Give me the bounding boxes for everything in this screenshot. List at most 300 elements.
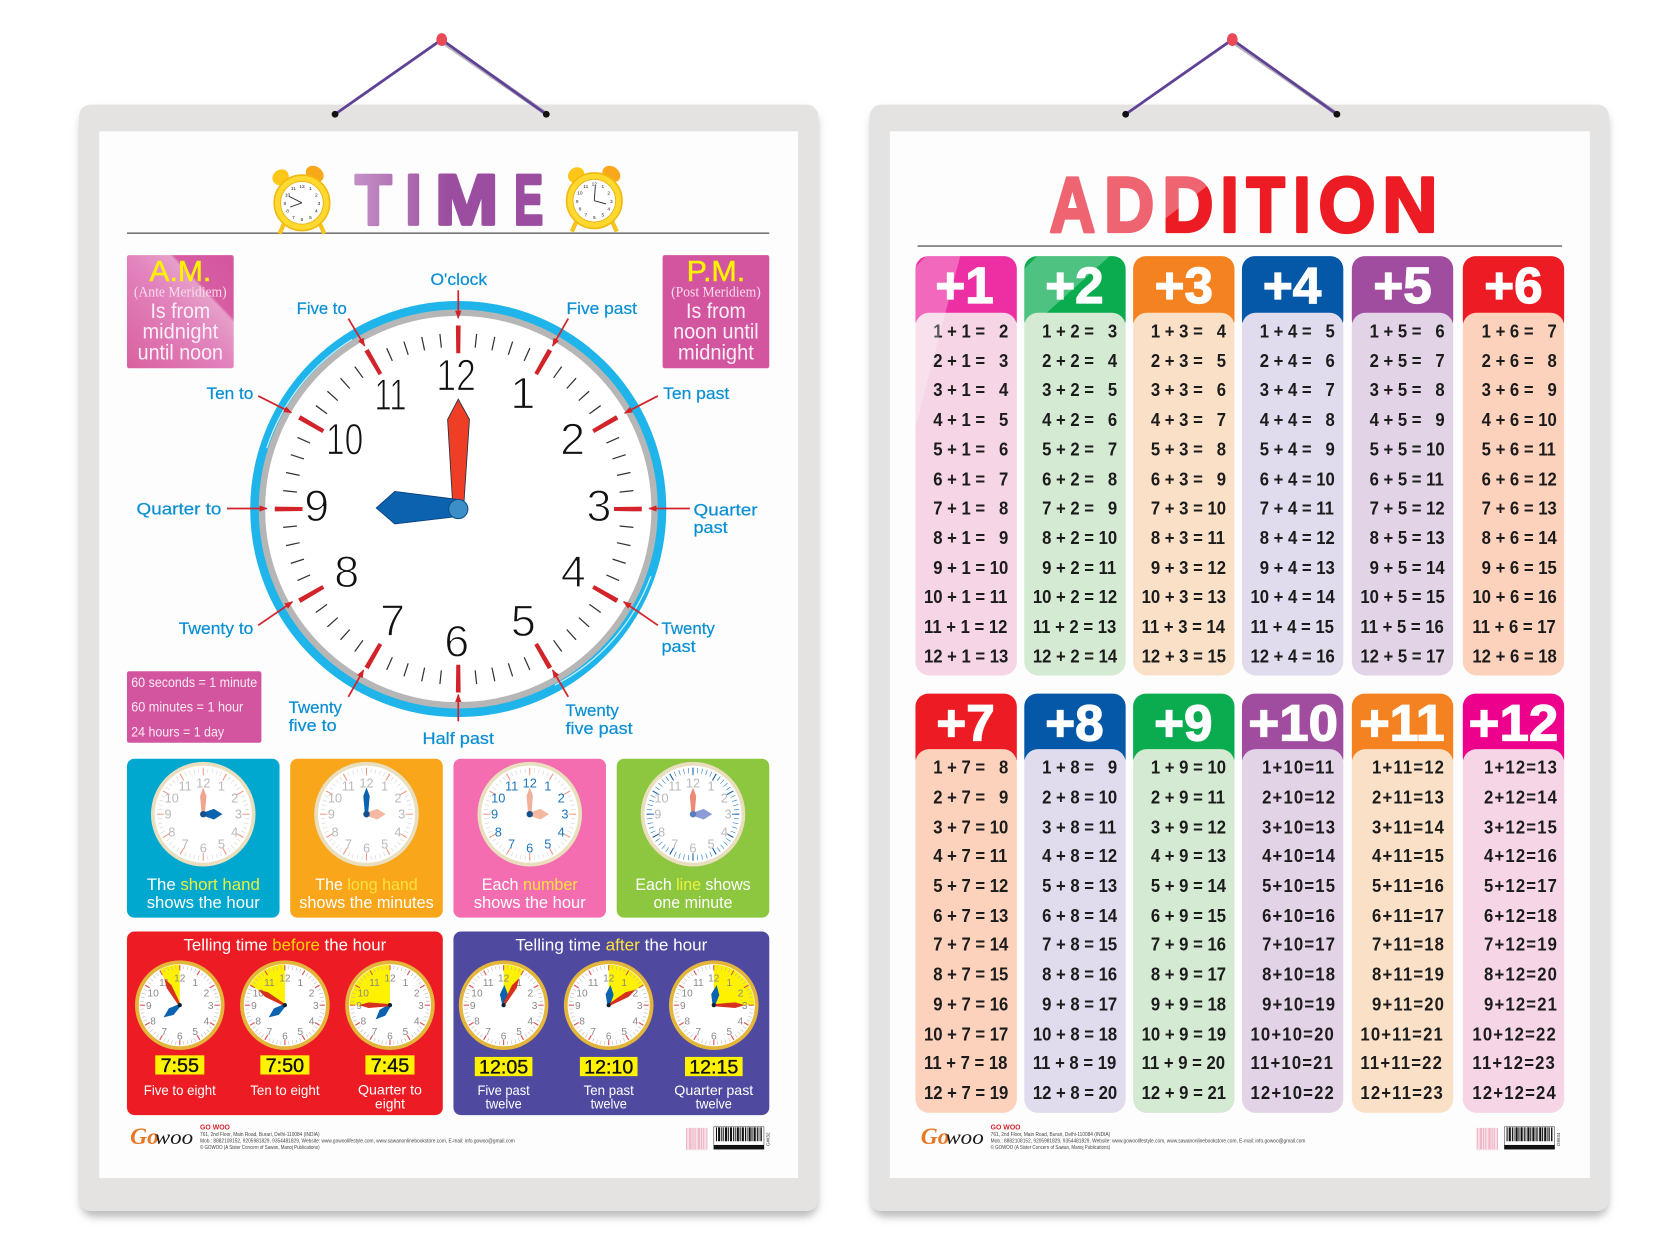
clock 12:10: 6 bbox=[606, 1031, 612, 1042]
panel: time units: 24 hours = 1 day bbox=[131, 723, 224, 739]
table rows: 1 + 4 = 5 bbox=[1250, 321, 1335, 341]
table rows: 4 + 8 = 12 bbox=[1033, 846, 1117, 866]
clock: 4 bbox=[558, 825, 565, 840]
table rows: 7 + 8 = 15 bbox=[1033, 934, 1117, 955]
clock 7:45 bbox=[345, 960, 435, 1050]
table rows: 10 + 7 = 17 bbox=[924, 1024, 1008, 1045]
logo: woo bbox=[155, 1127, 193, 1149]
table rows: 2 + 5 = 7 bbox=[1360, 350, 1445, 371]
table rows: 11 + 4 = 15 bbox=[1250, 616, 1334, 637]
clock: 5 bbox=[218, 836, 225, 851]
time 12:15: 12:15 bbox=[689, 1057, 738, 1078]
table rows: 11 + 2 = 13 bbox=[1033, 616, 1117, 637]
clock 7:55: 3 bbox=[208, 1001, 214, 1012]
table rows: 11 + 9 = 20 bbox=[1142, 1053, 1225, 1073]
card: each number: shows the hour bbox=[474, 893, 586, 912]
table rows: 12+12=24 bbox=[1472, 1082, 1557, 1103]
panel: P.M.: noon until bbox=[673, 319, 759, 343]
table rows: 2 + 4 = 6 bbox=[1250, 350, 1335, 371]
minute hand bbox=[448, 399, 469, 508]
table rows: 4 + 3 = 7 bbox=[1142, 409, 1226, 430]
board: addition poster frame bbox=[870, 105, 1609, 1216]
card: long hand: shows the minutes bbox=[299, 893, 434, 912]
table rows: 11 + 3 = 14 bbox=[1142, 616, 1225, 637]
icon: left alarm clock: 12 bbox=[299, 184, 305, 190]
labels: Five to bbox=[297, 299, 347, 318]
clock 7:45: 3 bbox=[418, 1001, 424, 1012]
table rows: 8 + 7 = 15 bbox=[924, 964, 1009, 985]
labels: Twenty to bbox=[179, 619, 253, 638]
table rows: 10+11=21 bbox=[1360, 1024, 1444, 1045]
table rows: 12 + 4 = 16 bbox=[1250, 646, 1335, 667]
table rows: 8 + 1 = 9 bbox=[924, 528, 1009, 548]
clock numbers: 5 bbox=[511, 596, 536, 646]
clock: 2 bbox=[721, 790, 728, 805]
table rows: 12 + 2 = 14 bbox=[1033, 646, 1117, 667]
clock 7:55: 7 bbox=[161, 1027, 167, 1038]
table rows: 8 + 5 = 13 bbox=[1360, 528, 1445, 548]
table rows: 2 + 8 = 10 bbox=[1033, 787, 1117, 808]
table rows: 6 + 9 = 15 bbox=[1142, 905, 1226, 926]
table rows: 6+12=18 bbox=[1472, 905, 1558, 926]
caption: Ten to eight bbox=[250, 1082, 320, 1098]
icon: left alarm clock: 11 bbox=[291, 186, 296, 192]
labels: Quarter to bbox=[137, 499, 221, 518]
column: +8 bbox=[1024, 694, 1126, 1113]
divider line: addition title bbox=[918, 245, 1562, 247]
title: ADDITION: I bbox=[1293, 161, 1311, 249]
table rows: 9 + 8 = 17 bbox=[1033, 994, 1117, 1015]
labels bbox=[137, 270, 758, 748]
table rows bbox=[1360, 757, 1445, 1103]
table rows: 4 + 9 = 13 bbox=[1142, 846, 1226, 866]
table rows: 3 + 3 = 6 bbox=[1142, 379, 1226, 400]
clock 12:15: 8 bbox=[684, 1016, 690, 1027]
table rows bbox=[1360, 321, 1445, 667]
clock: 10 bbox=[654, 790, 669, 805]
clock 7:50: 1 bbox=[298, 978, 304, 989]
table rows: 9 + 9 = 18 bbox=[1142, 994, 1226, 1015]
table rows: 1 + 9 = 10 bbox=[1142, 757, 1226, 778]
clock 7:45: 5 bbox=[403, 1027, 409, 1038]
column: +5 bbox=[1352, 256, 1453, 675]
clock 7:50: 9 bbox=[251, 1001, 257, 1012]
clock 7:55: 5 bbox=[192, 1027, 198, 1038]
logo bbox=[130, 1124, 193, 1150]
column: +11: +11 bbox=[1359, 695, 1445, 752]
table rows: 3 + 2 = 5 bbox=[1033, 379, 1117, 400]
clock 12:05: 8 bbox=[474, 1016, 480, 1027]
table rows: 5 + 4 = 9 bbox=[1250, 439, 1335, 460]
table rows: 4 + 5 = 9 bbox=[1360, 409, 1445, 430]
table rows: 8+12=20 bbox=[1472, 964, 1558, 985]
column: +10: +10 bbox=[1248, 695, 1338, 752]
title: ADDITION: D bbox=[1162, 161, 1213, 249]
publisher details: © GOWOO (A Sister Concern of Sawan, Manoj Publications) bbox=[991, 1144, 1110, 1151]
title: ADDITION: D bbox=[1104, 161, 1154, 249]
time 7:55: 7:55 bbox=[161, 1056, 199, 1077]
icon: left alarm clock: 2 bbox=[315, 192, 318, 198]
table rows: 9+10=19 bbox=[1250, 994, 1336, 1015]
clock 7:50 bbox=[240, 960, 330, 1050]
table rows: 2 + 6 = 8 bbox=[1472, 350, 1557, 371]
clock: 6 bbox=[689, 841, 697, 856]
icon: right alarm clock: 12 bbox=[592, 182, 597, 188]
clock 7:50: 7 bbox=[267, 1027, 273, 1038]
clock bbox=[641, 762, 745, 866]
table rows: 7 + 4 = 11 bbox=[1250, 498, 1334, 519]
clock 7:45: 6 bbox=[387, 1031, 393, 1042]
table rows: 8 + 6 = 14 bbox=[1472, 528, 1557, 548]
publisher details: 761, 2nd Floor, Main Road, Burari, Delhi-110084 (INDIA) bbox=[991, 1132, 1110, 1138]
table rows: 11 + 6 = 17 bbox=[1472, 616, 1556, 637]
clock 7:50: 4 bbox=[309, 1016, 315, 1027]
column: +10 bbox=[1242, 694, 1343, 1113]
clock 7:45: 10 bbox=[358, 989, 369, 1000]
clock 12:05: 10 bbox=[471, 989, 483, 1000]
title: ADDITION: N bbox=[1382, 161, 1438, 249]
publisher details: GO WOO bbox=[991, 1122, 1021, 1131]
column: +6 bbox=[1463, 256, 1564, 675]
table rows: 2 + 2 = 4 bbox=[1033, 350, 1117, 371]
time 7:45: 7:45 bbox=[371, 1056, 409, 1077]
title: ADDITION: O bbox=[1318, 161, 1375, 249]
time 7:50: 7:50 bbox=[266, 1056, 304, 1077]
clock 12:05: 7 bbox=[485, 1027, 491, 1038]
table rows: 11 + 8 = 19 bbox=[1033, 1053, 1117, 1073]
publisher details: 761, 2nd Floor, Main Road, Burari, Delhi-110084 (INDIA) bbox=[200, 1132, 320, 1138]
clock: 12 bbox=[523, 776, 537, 791]
table rows: 5 + 2 = 7 bbox=[1033, 439, 1117, 460]
table rows: 7 + 7 = 14 bbox=[924, 934, 1009, 955]
icon: left alarm clock: 5 bbox=[309, 215, 312, 221]
table rows bbox=[924, 321, 1009, 667]
table rows: 4 + 6 = 10 bbox=[1472, 409, 1557, 430]
clock 7:55: 2 bbox=[204, 989, 210, 1000]
table rows bbox=[1472, 321, 1557, 667]
labels: Twenty bbox=[662, 619, 716, 638]
card: short hand: shows the hour bbox=[147, 893, 260, 912]
logo: Go bbox=[130, 1124, 159, 1150]
table rows: 10 + 4 = 14 bbox=[1250, 586, 1335, 607]
panel: P.M.: Is from bbox=[686, 299, 746, 323]
title: TIME: M bbox=[435, 160, 498, 239]
clock: 7 bbox=[345, 836, 352, 851]
icon: right alarm clock: 2 bbox=[607, 190, 610, 196]
clock 12:10: 1 bbox=[621, 978, 627, 989]
clock: 9 bbox=[491, 806, 498, 821]
caption bbox=[674, 1082, 753, 1112]
labels: Ten past bbox=[663, 384, 730, 403]
caption: twelve bbox=[591, 1096, 627, 1112]
clock: 2 bbox=[558, 790, 565, 805]
labels: O'clock bbox=[431, 270, 488, 289]
column: +12: +12 bbox=[1469, 695, 1558, 752]
clock 7:45: 12 bbox=[384, 974, 396, 985]
card: long hand bbox=[290, 759, 443, 918]
table rows: 3 + 5 = 8 bbox=[1360, 379, 1445, 400]
icon: left alarm clock bbox=[269, 162, 330, 234]
table rows: 5 + 8 = 13 bbox=[1033, 875, 1117, 896]
clock 12:05 bbox=[459, 960, 548, 1050]
table rows: 3 + 6 = 9 bbox=[1472, 379, 1557, 400]
clock 12:15: 6 bbox=[711, 1031, 717, 1042]
table rows: 1+11=12 bbox=[1360, 757, 1445, 778]
column: +2 bbox=[1024, 256, 1126, 675]
clock numbers: 9 bbox=[304, 481, 329, 531]
table rows: 12 + 5 = 17 bbox=[1360, 646, 1445, 667]
clock 12:15: 4 bbox=[738, 1016, 744, 1027]
clock 12:15: 5 bbox=[726, 1027, 732, 1038]
clock: 8 bbox=[658, 825, 665, 840]
QR code bbox=[1477, 1128, 1498, 1150]
table rows: 1 + 5 = 6 bbox=[1360, 321, 1445, 341]
clock numbers: 10 bbox=[326, 415, 363, 465]
table rows bbox=[1250, 757, 1336, 1103]
icon: right alarm clock: 6 bbox=[593, 215, 596, 221]
title: ADDITION: T bbox=[1247, 161, 1285, 249]
minute ticks bbox=[289, 340, 627, 678]
clock 12:10: 10 bbox=[576, 989, 588, 1000]
table rows: 1 + 3 = 4 bbox=[1142, 321, 1226, 341]
clock 12:05: 3 bbox=[532, 1001, 538, 1012]
clock numbers: 11 bbox=[375, 370, 407, 420]
clock 7:45: 9 bbox=[356, 1001, 362, 1012]
table rows: 3+11=14 bbox=[1360, 817, 1445, 838]
table rows: 9+12=21 bbox=[1472, 994, 1558, 1015]
clock numbers: 2 bbox=[560, 415, 585, 465]
column: +11 bbox=[1352, 694, 1453, 1113]
caption: twelve bbox=[696, 1096, 732, 1112]
card: each number bbox=[453, 759, 606, 918]
panel: A.M.: A.M. bbox=[149, 256, 211, 288]
clock numbers: 8 bbox=[334, 547, 359, 597]
clock: 12 bbox=[359, 776, 374, 791]
table rows: 4+12=16 bbox=[1472, 846, 1558, 866]
panel: P.M.: midnight bbox=[678, 341, 754, 365]
table rows: 9 + 3 = 12 bbox=[1142, 557, 1226, 578]
table rows: 10 + 5 = 15 bbox=[1360, 586, 1445, 607]
table rows: 5 + 5 = 10 bbox=[1360, 439, 1445, 460]
clock 7:50: 10 bbox=[253, 989, 264, 1000]
panel: A.M.: Is from bbox=[150, 299, 210, 323]
clock: 8 bbox=[331, 825, 339, 840]
table rows: 7 + 2 = 9 bbox=[1033, 498, 1117, 519]
clock 7:50: 8 bbox=[255, 1016, 261, 1027]
clock 12:15: 12 bbox=[708, 974, 720, 985]
clock: 7 bbox=[508, 836, 515, 851]
table rows: 1 + 8 = 9 bbox=[1033, 757, 1117, 778]
table rows: 2 + 3 = 5 bbox=[1142, 350, 1226, 371]
labels: past bbox=[694, 518, 728, 537]
clock: 4 bbox=[394, 825, 402, 840]
clock 12:10: 5 bbox=[621, 1027, 627, 1038]
clock bbox=[477, 762, 582, 866]
icon: right alarm clock: 9 bbox=[576, 199, 579, 205]
clock: 3 bbox=[398, 806, 405, 821]
product code: GW34 bbox=[1556, 1132, 1562, 1146]
clock 12:05: 2 bbox=[527, 989, 533, 1000]
clock: 10 bbox=[165, 790, 179, 805]
column: +7: +7 bbox=[936, 695, 995, 752]
table rows: 11 + 5 = 16 bbox=[1360, 616, 1444, 637]
clock 12:15: 10 bbox=[681, 989, 693, 1000]
icon: left alarm clock: 7 bbox=[292, 215, 295, 221]
table rows: 6 + 8 = 14 bbox=[1033, 905, 1117, 926]
clock hub bbox=[449, 499, 468, 519]
clock: 9 bbox=[164, 806, 172, 821]
panel: time units bbox=[127, 671, 261, 743]
labels: Ten to bbox=[206, 384, 253, 403]
clock: 6 bbox=[363, 841, 370, 856]
icon: right alarm clock: 5 bbox=[601, 213, 604, 219]
clock: 7 bbox=[182, 836, 189, 851]
divider line: time title bbox=[127, 232, 769, 234]
clock 7:50: 3 bbox=[313, 1001, 319, 1012]
table rows: 4 + 2 = 6 bbox=[1033, 409, 1117, 430]
table rows: 8+10=18 bbox=[1250, 964, 1336, 985]
column: +3 bbox=[1133, 256, 1234, 675]
labels: Twenty bbox=[565, 701, 620, 720]
clock numbers: 6 bbox=[444, 616, 469, 666]
icon: right alarm clock: 8 bbox=[579, 206, 582, 212]
clock 12:15: 11 bbox=[693, 978, 704, 989]
panel: telling time before the hour bbox=[127, 932, 443, 1115]
table rows: 12 + 3 = 15 bbox=[1142, 646, 1226, 667]
column: +6: +6 bbox=[1484, 257, 1543, 314]
publisher details: Mob.: 8882108152, 9205981829, 9354481829, Website: www.gowoolifestyle.com, www.sawanonlinebookstore.com, E-mail: info.gowoo@gmail.com bbox=[991, 1139, 1306, 1145]
icon: right alarm clock: 7 bbox=[584, 213, 587, 219]
table rows: 1 + 1 = 2 bbox=[924, 321, 1008, 341]
clock: 5 bbox=[381, 836, 388, 851]
table rows: 10 + 8 = 18 bbox=[1033, 1024, 1117, 1045]
table rows: 7+12=19 bbox=[1472, 934, 1558, 955]
table rows: 6+10=16 bbox=[1250, 905, 1336, 926]
table rows: 5 + 3 = 8 bbox=[1142, 439, 1226, 460]
icon: left alarm clock: 4 bbox=[315, 208, 318, 214]
table rows: 7 + 9 = 16 bbox=[1142, 934, 1226, 955]
footer: addition poster bbox=[921, 1122, 1562, 1151]
clock numbers: 7 bbox=[380, 596, 405, 646]
table rows: 9+11=20 bbox=[1360, 994, 1445, 1015]
footer: time poster bbox=[130, 1122, 771, 1151]
barcode bbox=[1504, 1127, 1555, 1149]
QR code bbox=[686, 1128, 707, 1150]
callouts: minute labels and arrows bbox=[137, 270, 758, 748]
clock 7:50: 11 bbox=[264, 978, 275, 989]
table rows bbox=[1033, 321, 1117, 667]
heading: Telling time before the hour bbox=[184, 936, 387, 955]
hour ticks bbox=[289, 339, 628, 679]
card: short hand: The short hand bbox=[147, 875, 260, 894]
caption bbox=[477, 1082, 530, 1112]
icon: left alarm clock: 1 bbox=[309, 186, 312, 192]
card: each line bbox=[617, 759, 769, 918]
clock: 5 bbox=[544, 836, 551, 851]
panel: A.M.: (Ante Meridiem) bbox=[134, 285, 227, 301]
clock numbers: 3 bbox=[587, 481, 611, 531]
column: +2: +2 bbox=[1045, 257, 1104, 314]
card: each number: Each number bbox=[482, 875, 578, 894]
clock 12:10: 8 bbox=[579, 1016, 585, 1027]
main clock bbox=[256, 306, 661, 712]
table rows: 12 + 6 = 18 bbox=[1472, 646, 1557, 667]
table rows: 10 + 2 = 12 bbox=[1033, 586, 1117, 607]
table rows: 12 + 8 = 20 bbox=[1033, 1082, 1117, 1103]
publisher details: Mob.: 8882108152, 9205981829, 9354481829, Website: www.gowoolifestyle.com, www.sawanonlinebookstore.com, E-mail: info.gowoo@gmail.com bbox=[200, 1139, 515, 1145]
table rows: 10 + 3 = 13 bbox=[1142, 586, 1226, 607]
table rows: 3+10=13 bbox=[1250, 817, 1336, 838]
clock 12:10: 11 bbox=[588, 978, 599, 989]
clock 7:55: 1 bbox=[192, 978, 198, 989]
table rows: 2+11=13 bbox=[1360, 787, 1445, 808]
column: +1 bbox=[915, 256, 1017, 675]
table rows bbox=[1472, 757, 1558, 1103]
table rows: 10 + 9 = 19 bbox=[1142, 1024, 1226, 1045]
clock 12:05: 1 bbox=[516, 978, 522, 989]
table rows: 2 + 9 = 11 bbox=[1142, 787, 1225, 808]
clock numbers: 1 bbox=[510, 369, 535, 419]
card: each line: Each line shows bbox=[635, 875, 751, 894]
table rows: 6 + 5 = 11 bbox=[1360, 469, 1444, 490]
labels: five to bbox=[289, 716, 337, 735]
table rows: 8 + 9 = 17 bbox=[1142, 964, 1226, 985]
clock: 11 bbox=[178, 779, 192, 794]
hanging cord: addition poster bbox=[1122, 33, 1340, 118]
table rows: 5 + 9 = 14 bbox=[1142, 875, 1226, 896]
clock 7:55 bbox=[135, 960, 225, 1050]
table rows: 5+12=17 bbox=[1472, 875, 1558, 896]
table rows: 11+12=23 bbox=[1472, 1053, 1556, 1073]
caption: eight bbox=[375, 1096, 405, 1112]
clock: 11 bbox=[505, 779, 518, 794]
table rows: 12 + 7 = 19 bbox=[924, 1082, 1009, 1103]
table rows: 2 + 7 = 9 bbox=[924, 787, 1009, 808]
table rows: 3 + 1 = 4 bbox=[924, 379, 1009, 400]
column: +5: +5 bbox=[1373, 257, 1432, 314]
clock bbox=[151, 762, 256, 866]
caption: Five to eight bbox=[144, 1082, 216, 1098]
clock: 2 bbox=[394, 790, 402, 805]
table rows: 9 + 2 = 11 bbox=[1033, 557, 1117, 578]
clock 7:45: 2 bbox=[414, 989, 420, 1000]
table rows: 5 + 6 = 11 bbox=[1472, 439, 1556, 460]
table rows: 4+10=14 bbox=[1250, 846, 1336, 866]
clock: 11 bbox=[668, 779, 682, 794]
publisher details bbox=[200, 1122, 515, 1151]
labels: five past bbox=[565, 719, 633, 738]
clock 7:55: 4 bbox=[204, 1016, 210, 1027]
clock: 7 bbox=[671, 836, 678, 851]
table rows: 1+10=11 bbox=[1250, 757, 1335, 778]
column: +12 bbox=[1463, 694, 1564, 1113]
panel: P.M.: P.M. bbox=[687, 256, 745, 288]
clock numbers: 12 bbox=[436, 351, 476, 401]
clock 12:10: 7 bbox=[590, 1027, 596, 1038]
clock: 9 bbox=[654, 806, 661, 821]
clock: 1 bbox=[708, 779, 715, 794]
clock 7:50: 12 bbox=[279, 974, 291, 985]
clock bbox=[314, 762, 419, 866]
clock 7:45: 8 bbox=[360, 1016, 366, 1027]
column: +1: +1 bbox=[935, 257, 994, 314]
caption: twelve bbox=[485, 1096, 522, 1112]
clock 7:50: 6 bbox=[282, 1031, 288, 1042]
table rows bbox=[924, 757, 1009, 1103]
table rows: 3 + 9 = 12 bbox=[1142, 817, 1226, 838]
labels: Five past bbox=[567, 299, 637, 318]
clock: 12 bbox=[686, 776, 700, 791]
